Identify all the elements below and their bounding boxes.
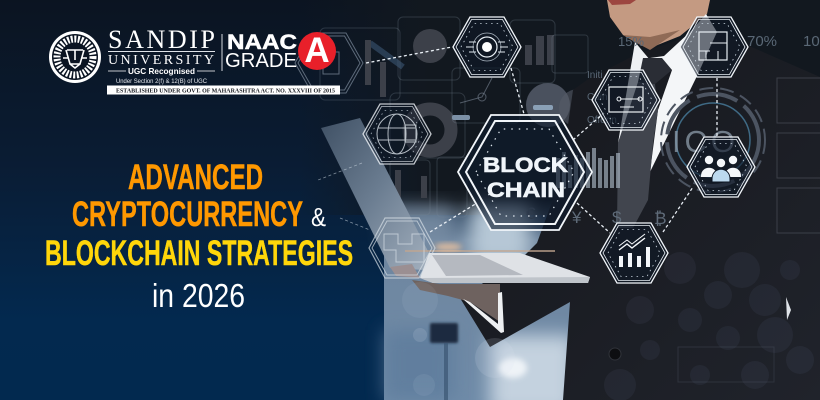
dashed connector lines xyxy=(366,47,717,233)
ampersand: & xyxy=(311,202,326,232)
grade A badge xyxy=(298,32,336,70)
face and neck xyxy=(607,0,710,48)
hexagon: circuit node top right xyxy=(680,17,748,77)
fingers on laptop xyxy=(390,264,420,278)
shirt sliver xyxy=(786,297,791,320)
title line: in 2026: in 2026 xyxy=(152,277,245,314)
SANDIP: SANDIP xyxy=(108,25,215,54)
faint currency symbols: $ xyxy=(612,208,622,227)
lion emblem xyxy=(49,31,101,83)
establishment strip xyxy=(107,86,340,94)
hexagon: blocks node over laptop xyxy=(369,218,435,278)
faint currency symbols xyxy=(526,204,667,229)
suit body xyxy=(460,28,820,400)
label: BLOCK: BLOCK xyxy=(483,154,568,177)
hexagon: ticket node xyxy=(592,70,660,130)
establishment text: ESTABLISHED UNDER GOVT. OF MAHARASHTRA ACT. NO. XXXVIII OF 2015 xyxy=(116,88,335,94)
laptop base xyxy=(405,243,590,283)
neck shadow xyxy=(623,30,680,50)
shirt left collar xyxy=(618,42,650,143)
ICO rings: ICO xyxy=(672,124,735,159)
ghost panels on suit xyxy=(777,78,820,233)
faint currency symbols: ¥ xyxy=(571,208,582,227)
necktie xyxy=(617,82,658,228)
logo: Sandip University NAAC grade A xyxy=(49,25,340,94)
ICO rings xyxy=(661,88,765,192)
Under Section: Under Section 2(f) & 12(B) of UGC xyxy=(116,78,207,85)
hexagon: target circuit node xyxy=(453,17,521,77)
wrist and hand xyxy=(412,280,500,322)
pocket flap xyxy=(678,347,774,382)
bokeh circles xyxy=(402,252,814,400)
hexagon: BLOCK CHAIN central node xyxy=(458,115,592,230)
logo: Sandip University NAAC grade A: A xyxy=(304,31,330,70)
shirt right panel xyxy=(650,14,717,172)
faint readouts: 15% xyxy=(618,34,644,49)
tie knot xyxy=(638,58,672,84)
GRADE: GRADE xyxy=(225,50,297,72)
lips xyxy=(608,0,636,5)
UGC Recognised: UGC Recognised xyxy=(128,66,195,76)
ghost charts behind hexagons xyxy=(320,17,597,217)
UNIVERSITY: UNIVERSITY xyxy=(108,53,214,68)
NAAC: NAAC xyxy=(227,31,297,54)
faint readouts: Offerin xyxy=(587,115,617,126)
bar chart behind blockchain hexagon xyxy=(556,148,620,188)
faint readouts xyxy=(587,33,820,126)
shirt cuff xyxy=(463,292,504,333)
jacket button xyxy=(609,348,621,360)
faint readouts: 70% xyxy=(747,33,777,50)
label: CHAIN: CHAIN xyxy=(487,179,565,202)
title line: BLOCKCHAIN STRATEGIES: BLOCKCHAIN STRATEGIES xyxy=(45,234,353,273)
laptop lid xyxy=(321,118,430,270)
faint currency symbols: € xyxy=(526,204,536,223)
faint currency symbols: ₿ xyxy=(654,209,667,229)
title line: CRYPTOCURRENCY: CRYPTOCURRENCY xyxy=(72,195,303,234)
hexagon: growth chart node xyxy=(600,223,668,283)
hexagon: faint clipped left node xyxy=(295,33,363,93)
faint readouts: Initi xyxy=(587,70,603,81)
faint dashed lines over laptop xyxy=(318,163,370,230)
title line: ADVANCED: ADVANCED xyxy=(128,158,263,197)
hexagon: people node xyxy=(687,137,755,197)
man in suit xyxy=(390,0,820,400)
title xyxy=(45,158,353,314)
hexagon: globe network node xyxy=(363,104,431,164)
faint readouts: Coin xyxy=(587,92,608,103)
